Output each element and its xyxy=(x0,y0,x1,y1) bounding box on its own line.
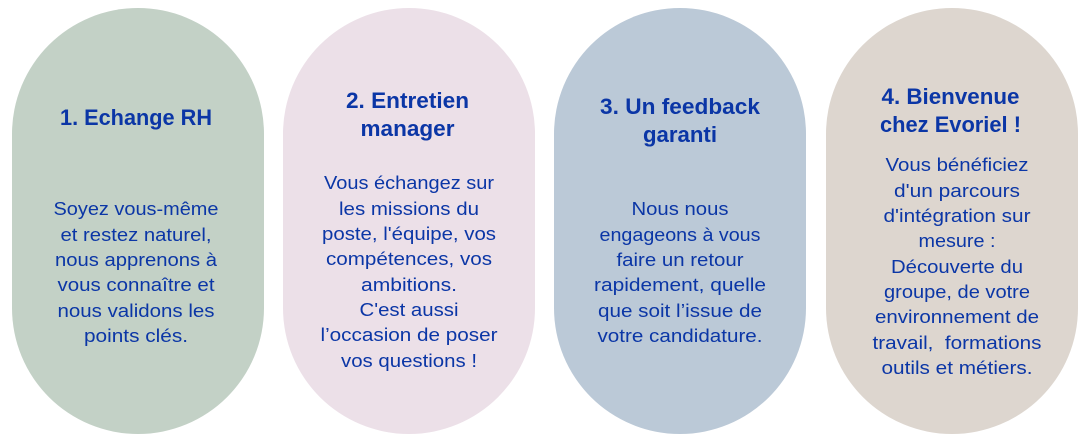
panel: step 2 Entretien manager xyxy=(283,8,535,434)
text block: step 3: rapidement, quelle xyxy=(594,274,766,295)
heading: step 4: 4. Bienvenue xyxy=(882,84,1020,109)
text block: step 3: faire un retour xyxy=(616,249,744,270)
text block: step 2: les missions du xyxy=(339,198,479,219)
text block: step 1: vous connaître et xyxy=(58,274,214,295)
text block: step 1: nous validons les xyxy=(58,300,214,321)
heading: step 4 xyxy=(880,84,1021,137)
text block: step 3: que soit l’issue de xyxy=(598,300,762,321)
text block: step 4: environnement de xyxy=(875,306,1039,327)
heading: step 3 xyxy=(600,94,761,147)
text block: step 4: d'intégration sur xyxy=(884,205,1030,226)
text block: step 1: nous apprenons à xyxy=(55,249,218,270)
pill background: step 3 xyxy=(554,8,806,434)
heading: step 2 xyxy=(346,88,469,141)
panel: step 4 Bienvenue chez Evoriel xyxy=(826,8,1078,434)
text block: step 3 xyxy=(594,198,766,346)
pill background: step 1 xyxy=(12,8,264,434)
text block: step 4: groupe, de votre xyxy=(884,281,1030,302)
text block: step 2: l’occasion de poser xyxy=(320,324,498,345)
text block: step 2: Vous échangez sur xyxy=(324,172,494,193)
heading: step 2: manager xyxy=(360,116,455,141)
heading: step 1: 1. Echange RH xyxy=(60,105,212,130)
text block: step 1: et restez naturel, xyxy=(60,224,212,245)
text block: step 4: outils et métiers. xyxy=(882,357,1032,378)
text block: step 4 xyxy=(872,154,1042,378)
panel: step 3 Un feedback garanti xyxy=(554,8,806,434)
text block: step 3: Nous nous xyxy=(632,198,728,219)
heading: step 4: chez Evoriel ! xyxy=(880,112,1021,137)
text block: step 2: C'est aussi xyxy=(360,299,458,320)
text block: step 1: Soyez vous-même xyxy=(54,198,218,219)
heading: step 3: 3. Un feedback xyxy=(600,94,761,119)
pill background: step 4 xyxy=(826,8,1078,434)
text block: step 4: Vous bénéficiez xyxy=(886,154,1028,175)
text block: step 1 xyxy=(54,198,218,346)
text block: step 4: Découverte du xyxy=(891,256,1023,277)
text block: step 2: vos questions ! xyxy=(341,350,477,371)
text block: step 2: compétences, vos xyxy=(326,248,492,269)
text block: step 2: poste, l'équipe, vos xyxy=(322,223,496,244)
text block: step 4: d'un parcours xyxy=(894,180,1020,201)
heading: step 3: garanti xyxy=(643,122,717,147)
panel: step 1 Echange RH xyxy=(12,8,264,434)
pill background: step 2 xyxy=(283,8,535,434)
text block: step 3: votre candidature. xyxy=(598,325,762,346)
text block: step 2: ambitions. xyxy=(361,274,457,295)
text block: step 1: points clés. xyxy=(84,325,188,346)
text block: step 4: mesure : xyxy=(918,230,996,251)
text block: step 2 xyxy=(320,172,498,371)
heading: step 2: 2. Entretien xyxy=(346,88,469,113)
text block: step 3: engageons à vous xyxy=(600,224,760,245)
text block: step 4: travail, formations xyxy=(872,332,1042,353)
